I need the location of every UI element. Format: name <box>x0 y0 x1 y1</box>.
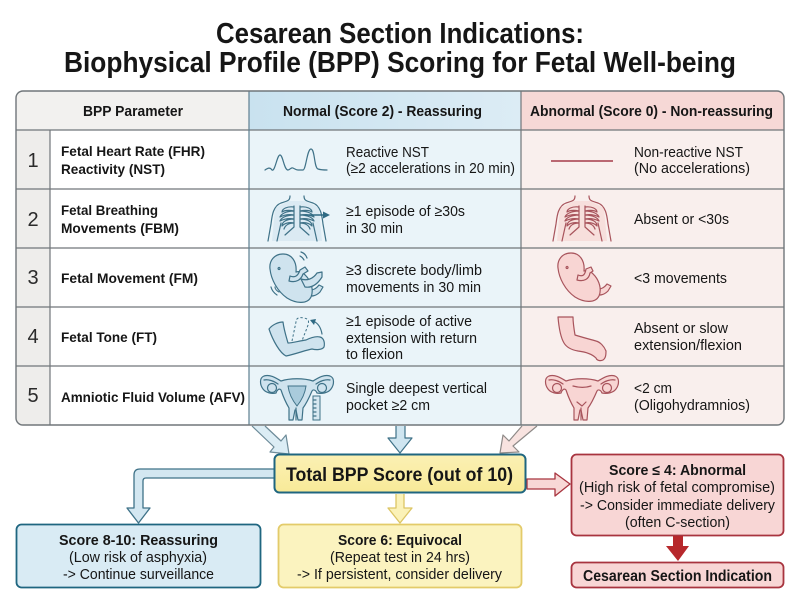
title: Biophysical Profile (BPP) Scoring for Fetal Well-being <box>64 47 736 79</box>
row 4 parameter: FT: Fetal Tone (FT) <box>61 329 157 345</box>
text: normal FHR: (≥2 accelerations in 20 min) <box>346 161 515 177</box>
arrow: parameter column to total score <box>252 426 289 454</box>
icon: moving fetus <box>270 252 323 302</box>
arrow: total score to equivocal <box>388 494 412 523</box>
icon: chest with breathing arrow <box>268 196 330 241</box>
icon: non-reactive flat line <box>551 160 613 162</box>
text: abnormal FBM: Absent or <30s <box>634 212 729 228</box>
text: normal FT <box>346 314 477 363</box>
text: abnormal FM: <3 movements <box>634 271 727 287</box>
row 3 parameter: FM: Fetal Movement (FM) <box>61 270 198 286</box>
icon: uterus with measuring ruler <box>260 375 334 420</box>
column header: abnormal: Abnormal (Score 0) - Non-reassuring <box>530 103 773 120</box>
cesarean section indication box <box>572 562 784 588</box>
title: Cesarean Section Indications: <box>216 18 584 50</box>
row 2 parameter: FBM: Movements (FBM) <box>61 220 179 236</box>
text: normal AFV: Single deepest vertical <box>346 381 487 397</box>
outcome box: reassuring: Score 8-10: Reassuring <box>59 533 218 549</box>
column header: BPP parameter: BPP Parameter <box>83 103 183 120</box>
row 5 parameter: AFV: Amniotic Fluid Volume (AFV) <box>61 389 245 405</box>
text: normal FT: ≥1 episode of active <box>346 314 472 330</box>
outcome box: abnormal: Score ≤ 4: Abnormal <box>609 463 746 479</box>
icon: arm extending and flexing <box>269 318 324 356</box>
outcome box: equivocal <box>278 524 522 588</box>
row 4 parameter: FT: 4 <box>27 326 39 348</box>
icon: still fetus <box>558 253 611 301</box>
text: abnormal FHR: (No accelerations) <box>634 161 750 177</box>
text: normal AFV: pocket ≥2 cm <box>346 398 430 414</box>
text: abnormal AFV: (Oligohydramnios) <box>634 398 750 414</box>
row 5 parameter: AFV <box>27 385 245 407</box>
outcome box: reassuring <box>16 524 260 588</box>
icon: limp arm <box>558 317 606 361</box>
row 5 parameter: AFV: 5 <box>27 385 39 407</box>
outcome box: reassuring: -> Continue surveillance <box>63 567 214 583</box>
text: normal FHR <box>346 145 515 177</box>
icon: reactive heart rate trace <box>265 149 327 170</box>
text: normal FBM: in 30 min <box>346 221 403 237</box>
outcome box: abnormal <box>572 454 784 536</box>
row 3 parameter: FM: 3 <box>27 267 39 289</box>
text: normal FM: movements in 30 min <box>346 280 481 296</box>
text: normal FHR: Reactive NST <box>346 145 429 161</box>
row 3 parameter: FM <box>27 267 198 289</box>
text: abnormal FT: extension/flexion <box>634 338 742 354</box>
text: normal FT: to flexion <box>346 347 403 363</box>
row 2 parameter: FBM: Fetal Breathing <box>61 202 158 218</box>
text: abnormal FHR <box>634 145 750 177</box>
outcome box: equivocal: -> If persistent, consider delivery <box>297 567 503 583</box>
row 2 parameter: FBM <box>27 202 179 236</box>
text: normal FM <box>346 263 482 296</box>
row 1 parameter: FHR <box>27 143 205 177</box>
arrow: normal column to total score <box>388 426 412 453</box>
text: abnormal FT <box>634 321 742 354</box>
icon: uterus, low fluid <box>546 375 618 420</box>
outcome box: equivocal: (Repeat test in 24 hrs) <box>330 550 470 566</box>
outcome box: abnormal: -> Consider immediate delivery <box>580 498 776 514</box>
icon: chest, no breathing <box>553 196 611 241</box>
arrow: abnormal column to total score <box>500 426 537 453</box>
title <box>64 18 736 79</box>
total score box: Total BPP Score (out of 10) <box>286 465 513 486</box>
outcome box: abnormal: (High risk of fetal compromise) <box>579 480 775 496</box>
text: abnormal FT: Absent or slow <box>634 321 729 337</box>
text: abnormal AFV <box>634 381 750 414</box>
arrow: total score to reassuring <box>127 469 275 523</box>
text: normal AFV <box>346 381 487 414</box>
row 1 parameter: FHR: Reactivity (NST) <box>61 161 165 177</box>
row 2 parameter: FBM: 2 <box>27 209 39 231</box>
arrow: total score to abnormal <box>527 473 570 496</box>
total score box <box>274 454 526 492</box>
row 1 parameter: FHR: Fetal Heart Rate (FHR) <box>61 143 205 159</box>
row 4 parameter: FT <box>27 326 157 348</box>
arrow: abnormal to cesarean indication <box>666 536 689 561</box>
text: abnormal FHR: Non-reactive NST <box>634 145 743 161</box>
panel: BPP scoring table <box>16 91 784 425</box>
text: abnormal AFV: <2 cm <box>634 381 672 397</box>
outcome box: abnormal: (often C-section) <box>625 515 730 531</box>
outcome box: equivocal: Score 6: Equivocal <box>338 533 462 549</box>
cesarean section indication box: Cesarean Section Indication <box>583 568 772 585</box>
outcome box: reassuring: (Low risk of asphyxia) <box>69 550 207 566</box>
text: normal FM: ≥3 discrete body/limb <box>346 263 482 279</box>
text: normal FT: extension with return <box>346 331 477 347</box>
column header: normal: Normal (Score 2) - Reassuring <box>283 103 482 120</box>
text: normal FBM <box>346 204 465 237</box>
row 1 parameter: FHR: 1 <box>27 150 39 172</box>
text: normal FBM: ≥1 episode of ≥30s <box>346 204 465 220</box>
